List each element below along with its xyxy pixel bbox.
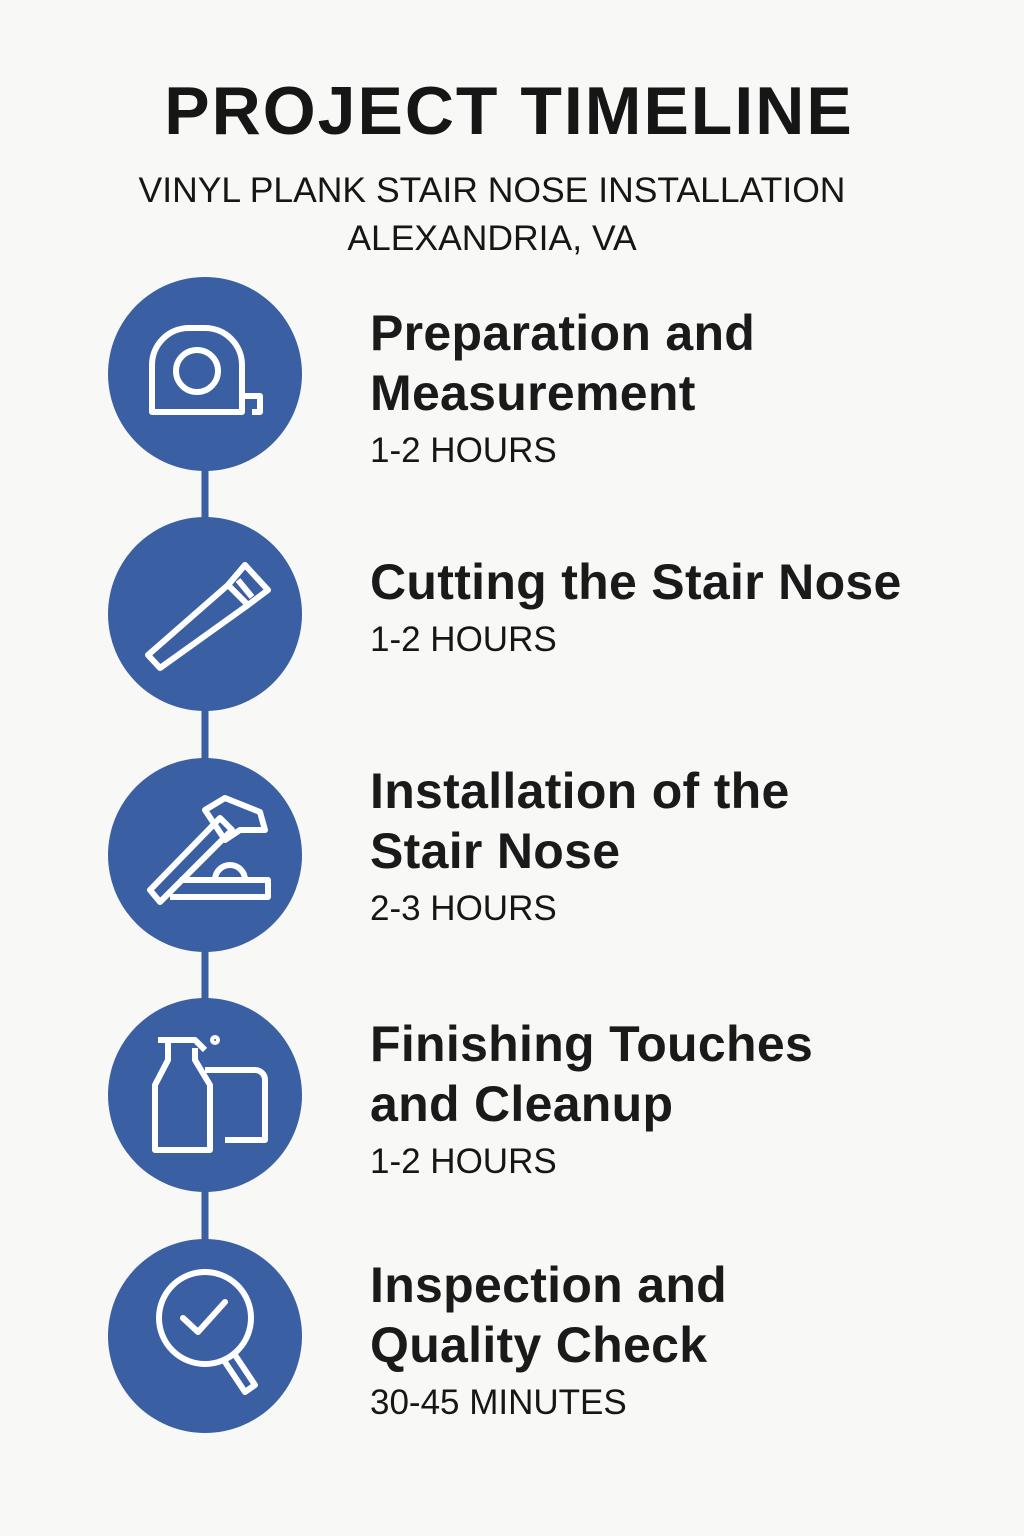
step 5 [370, 1257, 727, 1422]
step 5: 30-45 MINUTES [370, 1383, 627, 1422]
icon: tape measure [108, 277, 302, 471]
step 4 [370, 1016, 813, 1181]
step 3: Installation of the [370, 763, 790, 819]
step 1: Preparation and [370, 305, 755, 361]
step 1 [370, 305, 755, 470]
step 1: 1-2 HOURS [370, 431, 557, 470]
step 3: Stair Nose [370, 823, 620, 879]
icon: hammer [108, 758, 302, 952]
subtitle: ALEXANDRIA, VA [347, 218, 637, 258]
title: PROJECT TIMELINE [164, 73, 854, 149]
step 4: 1-2 HOURS [370, 1142, 557, 1181]
step 4: and Cleanup [370, 1076, 673, 1132]
step 3: 2-3 HOURS [370, 889, 557, 928]
step 1: Measurement [370, 365, 696, 421]
icon: spray bottle [108, 998, 302, 1192]
subtitle: VINYL PLANK STAIR NOSE INSTALLATION [139, 170, 845, 210]
icon: magnifier check [108, 1239, 302, 1433]
icon: saw [108, 517, 302, 711]
step 3 [370, 763, 790, 928]
step 2: 1-2 HOURS [370, 620, 557, 659]
step 5: Inspection and [370, 1257, 727, 1313]
step 2: Cutting the Stair Nose [370, 554, 902, 610]
step 4: Finishing Touches [370, 1016, 813, 1072]
step 2 [370, 554, 902, 659]
step 5: Quality Check [370, 1317, 707, 1373]
subtitle [138, 170, 845, 258]
